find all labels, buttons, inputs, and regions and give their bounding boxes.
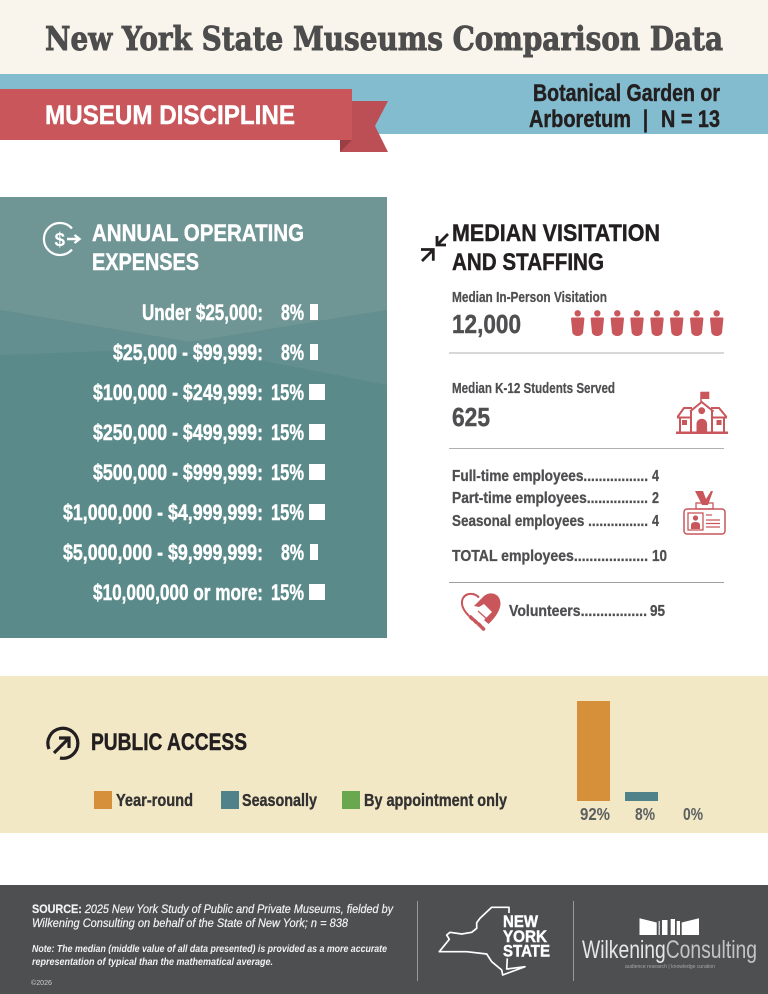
note text: representation of typical than the mathematical average. (32, 957, 273, 968)
students value: 625 (452, 402, 490, 432)
section heading (452, 220, 660, 276)
discipline band (0, 74, 768, 134)
row: 1,000,000 to 4,999,999: $1,000,000 - $4,999,999: (63, 500, 263, 525)
icon: dollar with arrow: $ (54, 230, 66, 251)
row: under 25,000: Under $25,000: (142, 300, 263, 325)
row: 25,000 to 99,999: 8% (281, 340, 304, 365)
employee counts: TOTAL employees................... (452, 548, 648, 565)
row: 5,000,000 to 9,999,999: 8% (281, 540, 304, 565)
logo: new york state: NEW (503, 912, 539, 931)
panel heading: ANNUAL OPERATING (92, 220, 304, 247)
row: 100,000 to 249,999: 15% (271, 380, 304, 405)
discipline name (529, 80, 720, 133)
icon: eight people (571, 310, 723, 336)
icon: dollar with arrow (44, 223, 80, 255)
row: 500,000 to 999,999: 15% (271, 460, 304, 485)
employee counts: 4 (652, 468, 659, 485)
icon: circular arrow (48, 728, 78, 758)
logo: new york state (439, 907, 550, 975)
row: 500,000 to 999,999: $500,000 - $999,999: (93, 460, 263, 485)
row: 250,000 to 499,999: 15% (271, 420, 304, 445)
row: 10,000,000 or more: 15% (271, 580, 304, 605)
source text: SOURCE: 2025 New York Study of Public and Private Museums, fielded by (32, 904, 394, 916)
employee counts: Full-time employees................. (452, 468, 648, 485)
employee counts: 4 (652, 513, 659, 530)
row: 100,000 to 249,999: $100,000 - $249,999: (93, 380, 263, 405)
source text: Wilkening Consulting on behalf of the State of New York; n = 838 (32, 918, 349, 930)
legend: Seasonally (242, 790, 317, 810)
row: 5,000,000 to 9,999,999: $5,000,000 - $9,999,999: (63, 540, 263, 565)
employee counts: Part-time employees................ (452, 490, 648, 507)
bar chart: 8% (635, 804, 655, 824)
note text: Note: The median (middle value of all data presented) is provided as a more accurate (32, 944, 387, 955)
copyright: ©2026 (31, 978, 52, 987)
icon: inward arrows (421, 234, 448, 261)
visitation value: 12,000 (452, 309, 521, 339)
legend (94, 790, 507, 810)
icon: heart handshake (462, 593, 500, 629)
row: 25,000 to 99,999: $25,000 - $99,999: (113, 340, 263, 365)
row: 10,000,000 or more: $10,000,000 or more: (93, 580, 263, 605)
ribbon: museum discipline (0, 89, 388, 152)
row: 1,000,000 to 4,999,999: 15% (271, 500, 304, 525)
ribbon label: MUSEUM DISCIPLINE (45, 100, 295, 130)
section heading: MEDIAN VISITATION (452, 220, 660, 247)
logo: wilkening consulting: audience research | knowledge curation (625, 964, 715, 970)
bar chart (577, 701, 703, 824)
panel: annual operating expenses (0, 197, 387, 638)
note text (32, 944, 387, 968)
icon: id badge (684, 491, 725, 534)
header band with title (0, 0, 768, 74)
bar chart: 0% (683, 804, 703, 824)
employee counts: 2 (652, 490, 659, 507)
panel: public access (0, 676, 768, 833)
volunteers: Volunteers................. (509, 603, 647, 620)
employee counts (452, 468, 667, 565)
discipline name: Arboretum (529, 106, 631, 133)
students label: Median K-12 Students Served (452, 381, 615, 397)
discipline name: N = 13 (661, 106, 720, 133)
legend: Year-round (116, 790, 193, 810)
logo: wilkening consulting (582, 918, 757, 970)
discipline name: Botanical Garden or (533, 80, 720, 107)
logo: new york state: STATE (503, 942, 550, 960)
panel heading: EXPENSES (92, 249, 199, 276)
panel heading (92, 220, 304, 276)
row: under 25,000: 8% (281, 300, 304, 325)
employee counts: 10 (652, 548, 667, 565)
panel: median visitation and staffing (421, 220, 728, 629)
bar chart: 92% (580, 804, 610, 824)
visitation label: Median In-Person Visitation (452, 290, 607, 306)
section heading: PUBLIC ACCESS (91, 729, 247, 756)
employee counts: Seasonal employees ................ (452, 513, 648, 530)
logo: new york state: YORK (503, 927, 548, 946)
discipline name: | (643, 106, 648, 133)
expense rows (63, 300, 325, 605)
section heading: AND STAFFING (452, 249, 604, 276)
volunteers: 95 (650, 603, 665, 620)
legend: By appointment only (364, 790, 507, 810)
footer (0, 885, 768, 994)
icon: school (676, 392, 728, 434)
source text (32, 904, 394, 930)
row: 250,000 to 499,999: $250,000 - $499,999: (93, 420, 263, 445)
